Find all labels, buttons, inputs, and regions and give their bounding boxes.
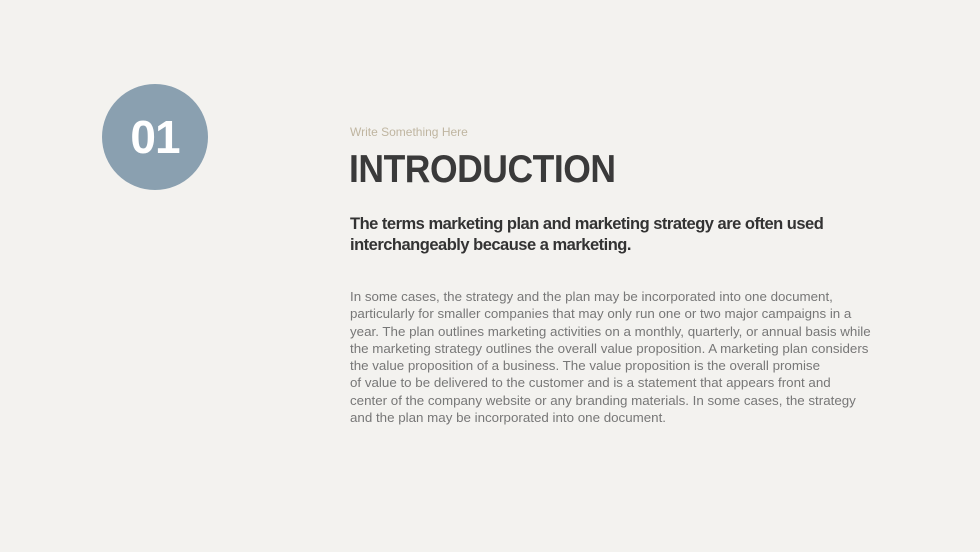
body paragraph: particularly for smaller companies that may only run one or two major campaigns in a — [350, 306, 851, 321]
lead text — [350, 215, 823, 254]
body paragraph — [350, 289, 871, 425]
body paragraph: the value proposition of a business. The value proposition is the overall promise — [350, 358, 820, 373]
body paragraph: In some cases, the strategy and the plan may be incorporated into one document, — [350, 289, 833, 304]
body paragraph: the marketing strategy outlines the overall value proposition. A marketing plan considers — [350, 341, 868, 356]
number badge — [102, 84, 208, 190]
body paragraph: of value to be delivered to the customer and is a statement that appears front and — [350, 375, 831, 390]
kicker text: Write Something Here — [350, 125, 468, 139]
number badge: 01 — [130, 111, 180, 163]
body paragraph: and the plan may be incorporated into one document. — [350, 410, 666, 425]
body paragraph: year. The plan outlines marketing activities on a monthly, quarterly, or annual basis while — [350, 324, 871, 339]
lead text: The terms marketing plan and marketing strategy are often used — [350, 215, 823, 233]
body paragraph: center of the company website or any branding materials. In some cases, the strategy — [350, 393, 856, 408]
title: INTRODUCTION — [349, 148, 616, 191]
lead text: interchangeably because a marketing. — [350, 236, 631, 254]
